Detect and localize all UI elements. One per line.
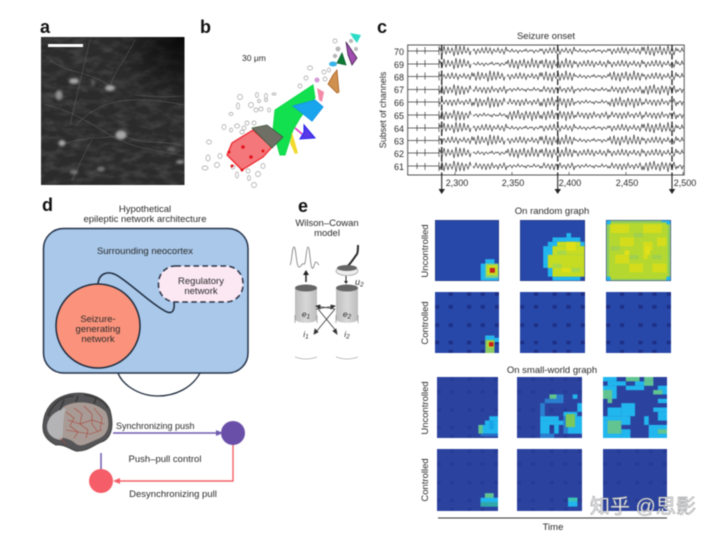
label a: a [40,17,51,37]
red assembly [227,130,272,172]
heatmap uncontrolled t3 [605,219,672,282]
channel labels: 64 [394,124,404,134]
heatmap controlled t3 [605,291,672,354]
x ticks and labels: 2,400 [559,178,581,188]
connecting curve [98,273,174,313]
channel labels: 70 [394,47,404,57]
right cylinder e2: e [343,309,348,319]
left cylinder e1: e [302,309,307,319]
right cylinder e2: i [344,329,346,339]
channel labels: 61 [394,162,404,172]
regulatory network: network [184,286,218,297]
red node [89,469,113,493]
left cylinder e1 [295,284,317,359]
row label controlled: Controlled [420,301,431,345]
micrograph image [41,37,184,185]
x ticks and labels: 2,350 [502,178,524,188]
push-pull control label: Push–pull control [129,454,201,465]
electrode stimulator: u [355,277,360,287]
y axis label: Subset of channels [378,71,388,148]
heatmap controlled t1 [434,291,500,354]
panel a: fluorescence micrograph [40,17,184,185]
bright green assembly [273,85,315,155]
electrode stimulator: 2 [359,282,364,288]
heatmap uncontrolled t2 [519,219,586,282]
right cylinder e2: 2 [345,334,350,340]
plot frame [408,45,684,175]
label c: c [377,17,387,37]
heatmap uncontrolled t1 [434,219,500,282]
channel labels [394,47,404,172]
heatmap uncontrolled t2 [516,376,583,439]
heading: model [314,228,340,239]
heading: Hypothetical [119,204,171,215]
heading: Wilson–Cowan [295,218,359,229]
dashed markers and arrows [438,45,675,194]
channel labels: 67 [394,85,404,95]
panel: on small-world graph heatmaps [420,365,667,533]
grey overlap assembly [252,125,283,148]
row label uncontrolled: Uncontrolled [420,224,431,278]
row label controlled: Controlled [420,458,431,502]
x ticks and labels: 2,500 [674,178,696,188]
scale text: 30 μm [242,53,266,63]
purple node [221,421,245,445]
x ticks and labels: 2,300 [446,178,468,188]
yellow assembly [290,132,298,154]
blue assembly [293,100,323,121]
watermark: 知乎 @思影 [590,495,696,518]
panel b: cell assemblies [200,17,361,188]
heading [83,204,207,225]
heatmap controlled t1 [436,448,499,512]
channel labels: 69 [394,60,404,70]
scale bar [48,44,83,47]
desynchronizing pull arrow: Desynchronizing pull [129,489,217,500]
desynchronizing pull arrow [113,445,233,500]
regulatory network [158,266,243,302]
heatmap controlled t2 [516,448,583,512]
brown assembly [328,70,339,93]
output arrow [303,270,309,282]
cyan assembly [350,33,361,43]
heading [295,218,359,239]
waveform [290,247,319,268]
brain icon [43,393,112,451]
channel labels: 68 [394,72,404,82]
title seizure onset: Seizure onset [517,31,575,42]
label d: d [42,195,53,215]
label b: b [200,17,211,37]
surrounding neocortex label: Surrounding neocortex [97,246,193,257]
grey unassigned neurons [202,39,337,188]
seizure-generating network [56,284,140,368]
heading: On small-world graph [507,365,597,376]
purple assembly [346,42,357,65]
heatmap controlled t3 [602,448,668,512]
label e: e [298,196,308,216]
heading: epileptic network architecture [83,214,207,225]
panel c: EEG traces [377,17,696,194]
heatmap controlled t2 [519,291,586,354]
heatmap uncontrolled t1 [436,376,499,439]
heatmap uncontrolled t3 [602,376,668,439]
pink assembly [314,78,324,102]
left cylinder e1: 1 [305,334,309,340]
coupling arrows [314,305,337,334]
surrounding neocortex box [44,228,248,373]
left cylinder e1: 1 [307,314,311,320]
time axis [438,517,667,519]
channel labels: 63 [394,136,404,146]
synchronizing push arrow [113,421,223,436]
panel: on random graph heatmaps [420,206,671,353]
seizure-generating network: generating [76,324,120,335]
violet assembly [295,125,315,139]
dark green assembly [337,53,346,65]
heading: On random graph [515,206,589,217]
right cylinder e2 [336,284,358,359]
right cylinder e2: 2 [347,314,352,320]
channel labels: 66 [394,98,404,108]
x ticks and labels: 2,450 [616,178,638,188]
left cylinder e1: i [303,329,305,339]
panel d: hypothetical network [42,195,248,500]
channel labels: 62 [394,149,404,159]
synchronizing push arrow: Synchronizing push [116,421,195,431]
lower connection curve [116,365,200,396]
small blue assembly [329,62,337,66]
regulatory network: Regulatory [178,276,224,287]
x ticks and labels [446,172,696,188]
traces [408,45,684,172]
seizure-generating network: network [81,334,115,345]
row label uncontrolled: Uncontrolled [420,381,431,435]
time label: Time [543,522,563,533]
panel e: Wilson-Cowan model [290,196,364,359]
electrode stimulator [336,245,364,288]
channel labels: 65 [394,111,404,121]
purple stem [100,453,102,471]
seizure-generating network: Seizure- [80,314,116,325]
